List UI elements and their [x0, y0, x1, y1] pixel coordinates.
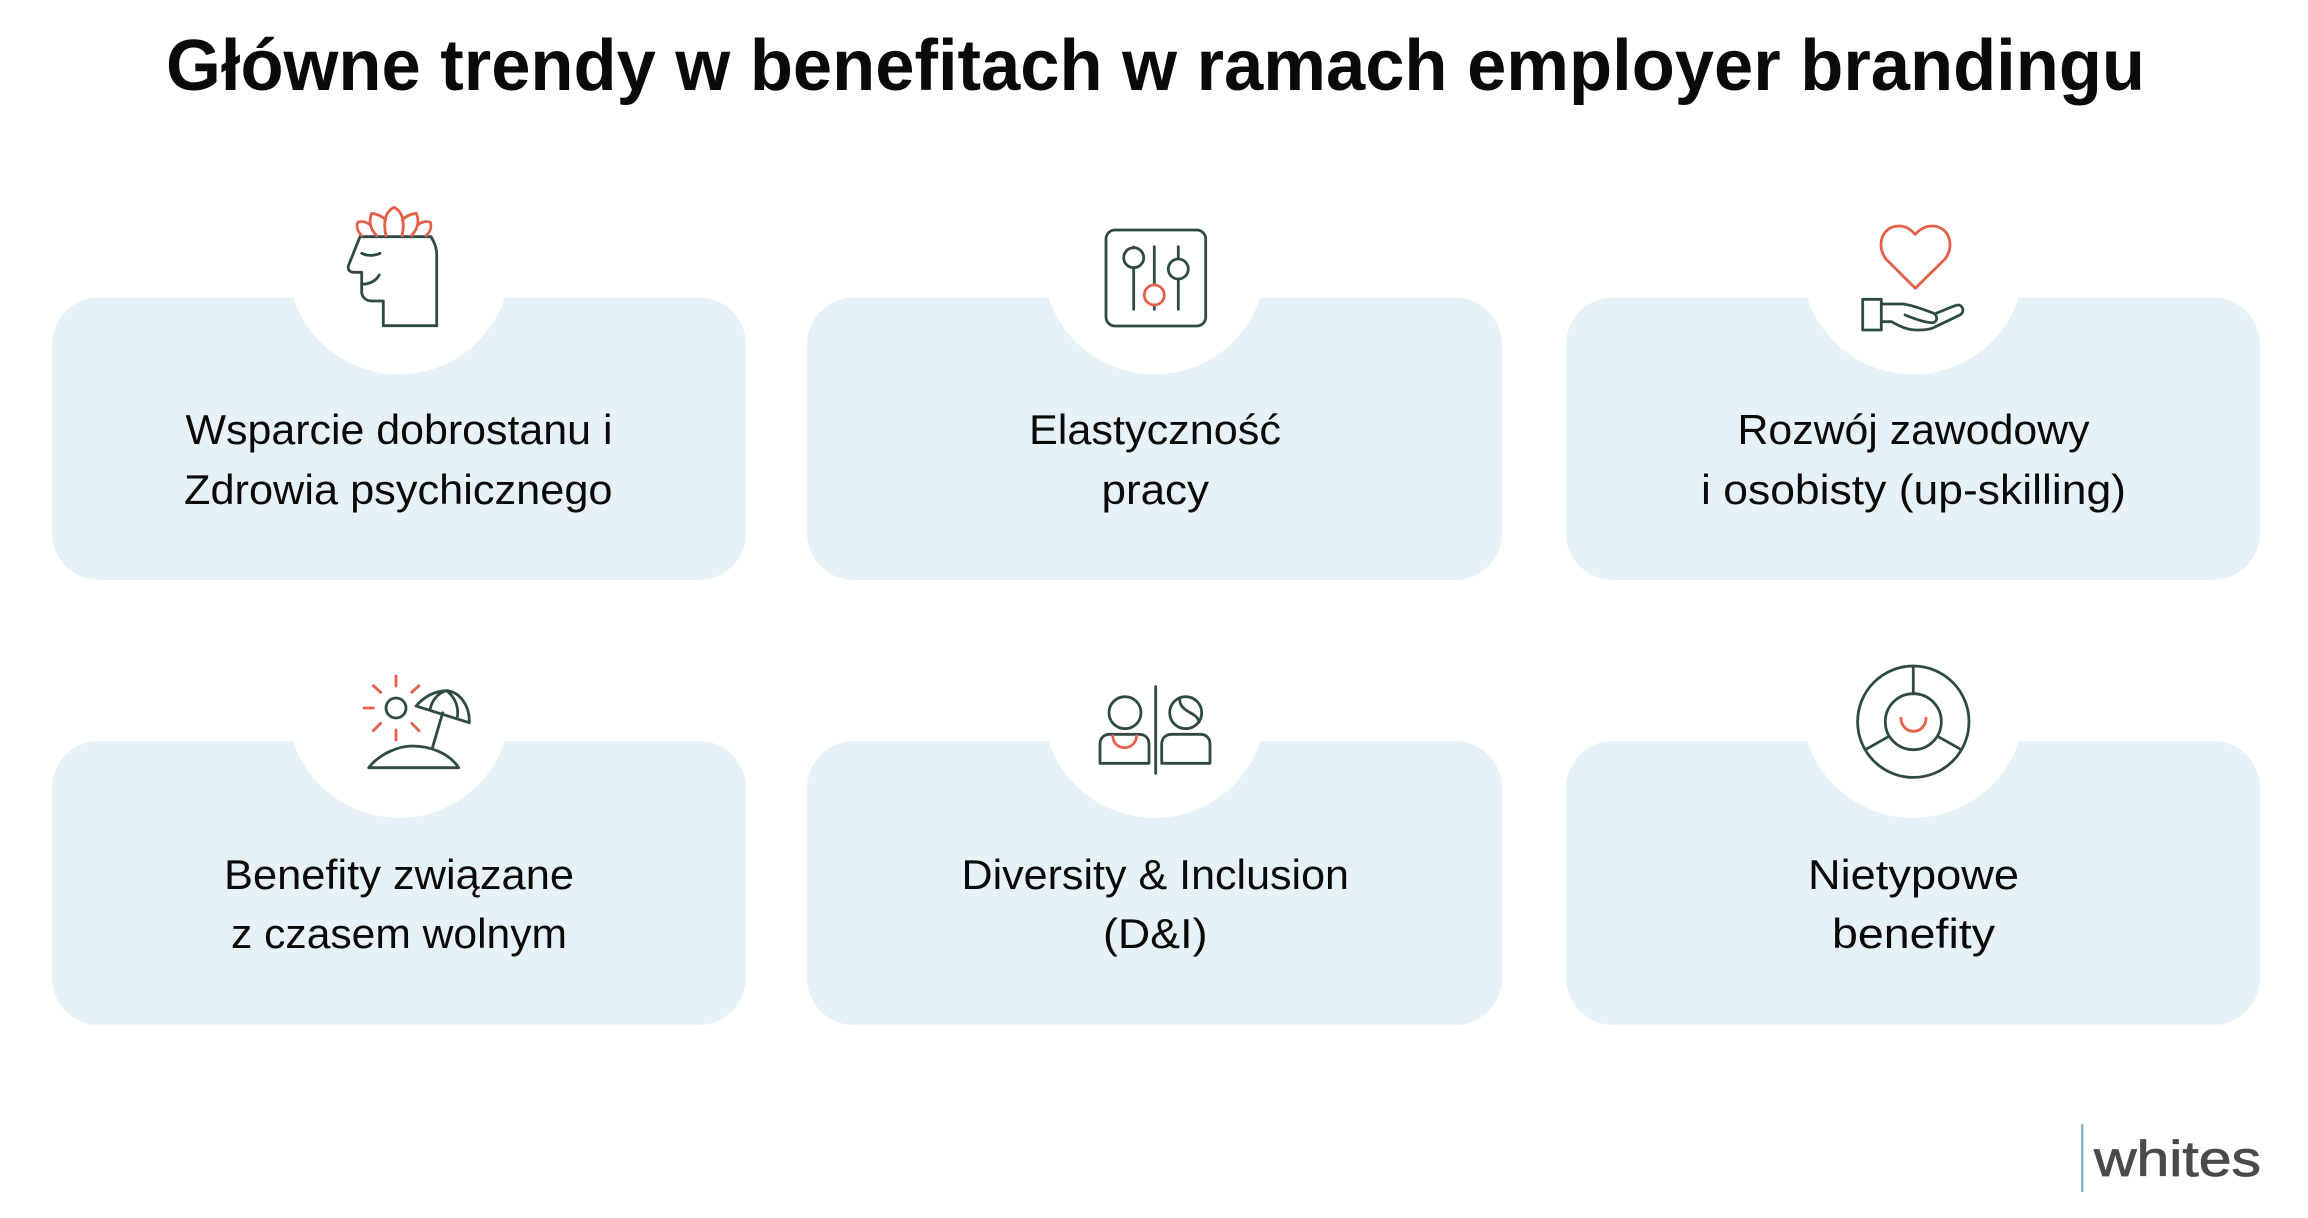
card background [807, 741, 1502, 1025]
text: label [962, 851, 1349, 957]
text: label [224, 851, 574, 957]
text: label: Nietypowe [1808, 851, 2019, 898]
text: label: pracy [1102, 466, 1209, 513]
text: label [1029, 406, 1281, 513]
text: label: i osobisty (up-skilling) [1701, 466, 2126, 513]
title: Główne trendy w benefitach w ramach employer brandingu [166, 26, 2145, 106]
panel: wellbeing and mental health [52, 207, 746, 580]
icon: heart in hand [1863, 226, 1963, 330]
text: label: Rozwój zawodowy [1738, 406, 2090, 453]
text: label: benefity [1832, 910, 1995, 957]
icon: two people [1100, 687, 1210, 773]
card background [1566, 298, 2260, 580]
panel: free time benefits [52, 676, 746, 1025]
card background [52, 741, 746, 1025]
icon: sliders [1106, 230, 1206, 326]
card background [1566, 741, 2260, 1025]
text: label [1808, 851, 2019, 957]
logo: whites: whites [2093, 1131, 2261, 1187]
text: label [184, 406, 612, 513]
text: label: Diversity & Inclusion [962, 851, 1349, 898]
panel: unusual benefits [1566, 666, 2260, 1025]
text: label: (D&I) [1103, 910, 1208, 957]
icon: head with lotus [348, 207, 437, 326]
panel: diversity and inclusion [807, 687, 1502, 1025]
icon: smile wheel [1858, 666, 1969, 777]
text: label: Wsparcie dobrostanu i [186, 406, 612, 453]
text: label: Elastyczność [1029, 406, 1281, 453]
text: label: Zdrowia psychicznego [184, 466, 612, 513]
text: label: z czasem wolnym [231, 910, 567, 957]
text: label: Benefity związane [224, 851, 574, 898]
panel: work flexibility [807, 230, 1502, 580]
text: label [1701, 406, 2126, 513]
icon: beach [364, 676, 469, 768]
panel: professional development [1566, 226, 2260, 580]
card background [807, 298, 1502, 580]
card background [52, 298, 746, 580]
